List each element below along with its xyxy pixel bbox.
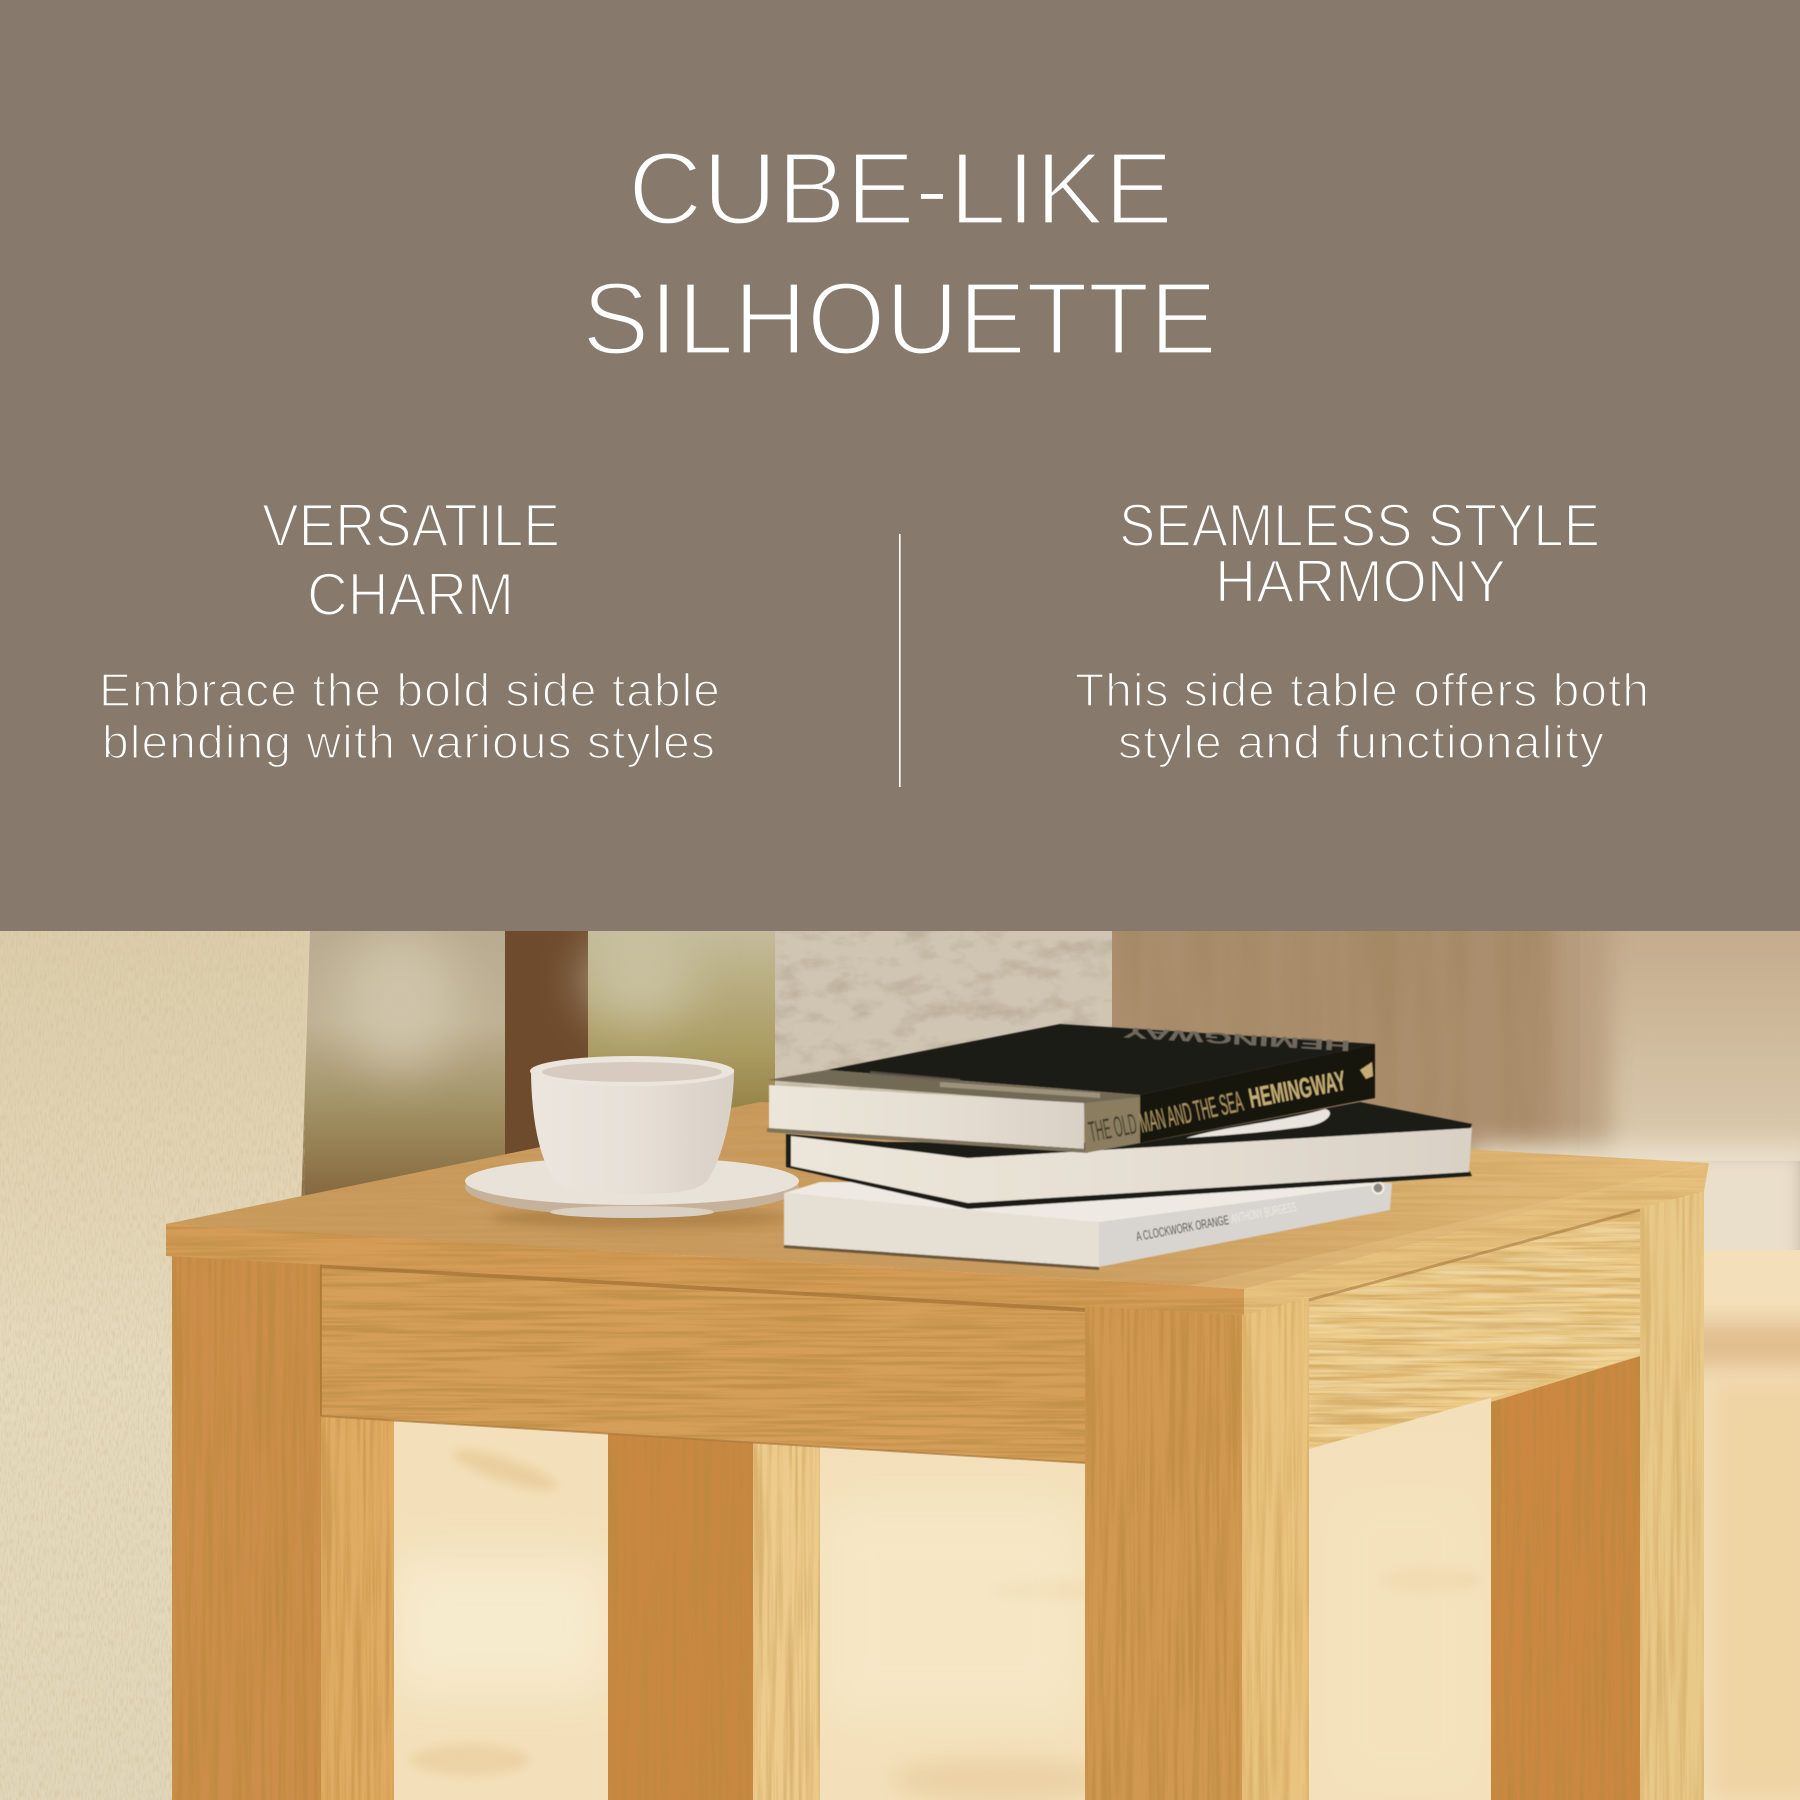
saucer — [465, 1157, 799, 1218]
top book: the old man and the sea: MAN AND THE SEA — [1137, 1086, 1246, 1140]
feature: versatile charm — [99, 492, 721, 768]
top book: the old man and the sea — [767, 1023, 1375, 1153]
text block: versatile charm description: Embrace the bold side table — [99, 664, 721, 716]
photo: side table scene — [0, 900, 1800, 1800]
top book: the old man and the sea: HEMINGWAY — [1123, 1023, 1351, 1054]
floor — [300, 1250, 1800, 1800]
front left leg — [172, 1256, 394, 1800]
text block: versatile charm description — [99, 664, 721, 768]
text block: seamless style description: style and functionality — [1118, 716, 1605, 768]
bottom book: a clockwork orange: A CLOCKWORK ORANGE — [1135, 1212, 1230, 1244]
stack of books — [767, 1023, 1472, 1270]
cup — [530, 1056, 734, 1194]
left fabric panel — [0, 931, 310, 1800]
top book: the old man and the sea: THE OLD — [1086, 1108, 1139, 1149]
table top — [160, 1100, 1720, 1320]
right leg — [1640, 1187, 1704, 1800]
front corner leg — [1085, 1295, 1309, 1800]
back left leg — [608, 1430, 820, 1800]
saucer shadow — [490, 1207, 790, 1229]
right apron — [1309, 1200, 1640, 1460]
heading: versatile charm — [262, 492, 560, 628]
heading: seamless style harmony: HARMONY — [1215, 548, 1506, 615]
title: SILHOUETTE — [582, 261, 1217, 376]
top book: the old man and the sea: HEMINGWAY — [1246, 1065, 1349, 1114]
side table — [160, 1100, 1720, 1800]
text block: seamless style description — [1075, 664, 1650, 768]
back right leg — [1491, 1356, 1640, 1800]
heading: versatile charm: CHARM — [307, 561, 514, 628]
title — [582, 131, 1217, 376]
middle book — [786, 1102, 1472, 1209]
text block: seamless style description: This side table offers both — [1075, 664, 1650, 716]
title: CUBE-LIKE — [628, 131, 1173, 246]
text block: versatile charm description: blending with various styles — [102, 716, 716, 768]
heading: seamless style harmony: SEAMLESS STYLE — [1119, 492, 1600, 559]
heading: versatile charm: VERSATILE — [262, 492, 560, 559]
feature: seamless style harmony — [1075, 492, 1650, 768]
heading: seamless style harmony — [1119, 492, 1600, 615]
background panel — [0, 0, 1800, 931]
bottom book: a clockwork orange: ANTHONY BURGESS — [1230, 1199, 1298, 1226]
coffee cup and saucer — [465, 1056, 799, 1229]
room backdrop — [300, 900, 1800, 1315]
bottom book: a clockwork orange — [784, 1182, 1392, 1270]
front apron — [321, 1255, 1085, 1470]
